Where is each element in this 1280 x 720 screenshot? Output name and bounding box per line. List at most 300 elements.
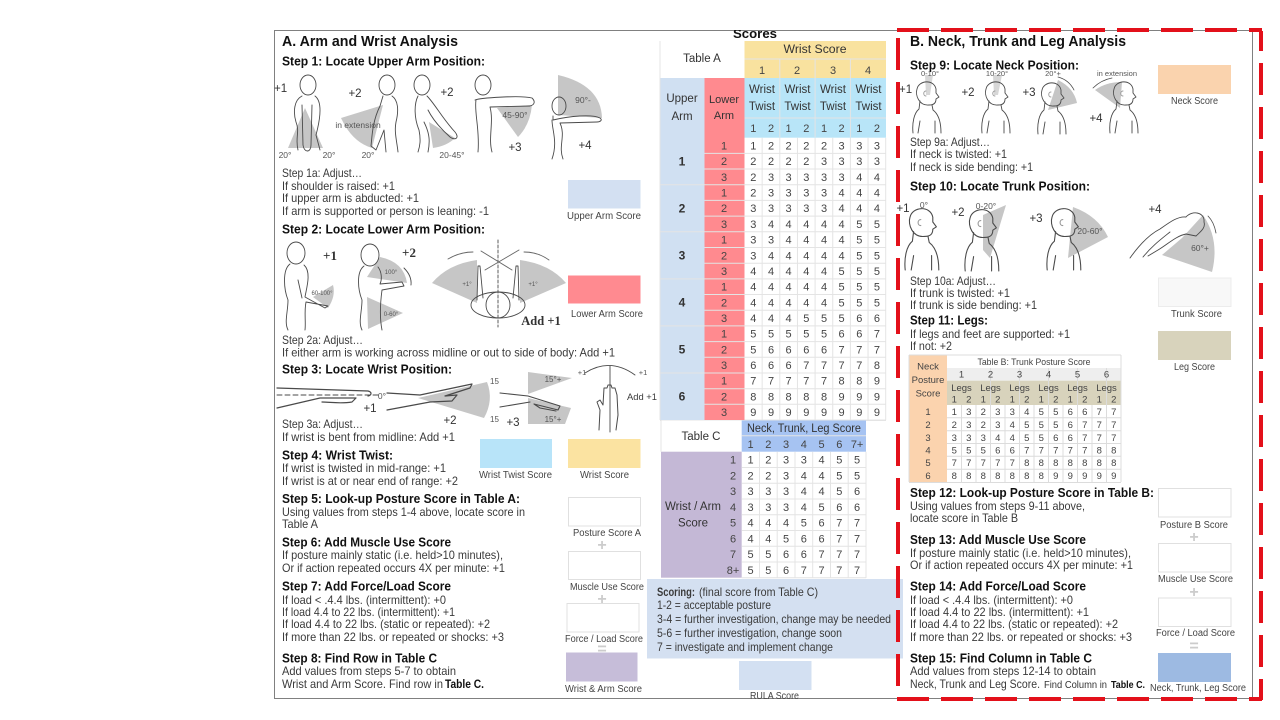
step 12: Using values from steps 9-11 above, — [910, 500, 1085, 513]
icons: trunk positions: +1 — [896, 203, 910, 215]
icons: wrist positions: Add +1 — [627, 392, 657, 403]
icons: wrist positions — [277, 365, 657, 432]
step 11: If not: +2 — [910, 340, 952, 353]
score box: muscle use — [568, 552, 645, 593]
step 10a text — [910, 275, 1037, 312]
step 9 heading: Step 9: Locate Neck Position: — [910, 58, 1079, 72]
score box: leg: Leg Score — [1174, 362, 1215, 373]
table B headers: 2 — [988, 370, 993, 380]
table B headers: Posture — [912, 375, 944, 386]
step 5: Step 5: Look-up Posture Score in Table A: — [282, 491, 520, 506]
step 7 — [282, 578, 504, 644]
table C headers: Wrist / Arm — [665, 501, 721, 513]
table A headers: Wrist — [785, 84, 811, 96]
score box: wrist: Wrist Score — [580, 470, 630, 481]
icons: wrist positions: +1 — [578, 368, 586, 377]
score box: neck — [1158, 65, 1231, 107]
table A values: 44444555 — [750, 282, 880, 294]
table A values: 66677778 — [750, 360, 880, 372]
table A headers: Upper — [666, 93, 698, 105]
lower arm row labels: 2 — [721, 344, 727, 356]
icons: trunk positions — [896, 200, 1216, 272]
step 8: Step 8: Find Row in Table C — [282, 650, 438, 666]
table C row labels: 5 — [730, 518, 736, 530]
lower arm row labels: 2 — [721, 156, 727, 168]
step 1a text: If arm is supported or person is leaning: -1 — [282, 205, 489, 218]
icons: trunk positions: 0-20° — [976, 201, 996, 211]
table B headers: Table B: Trunk Posture Score — [978, 357, 1090, 368]
lower arm row labels: 3 — [721, 266, 727, 278]
score box: force load: Force / Load Score — [565, 634, 644, 645]
table B row labels: 3 — [925, 433, 931, 444]
icons: trunk positions: +3 — [1029, 213, 1043, 225]
step 4 — [282, 448, 458, 488]
panel: B neck, trunk and leg analysis — [896, 33, 1247, 694]
step 3a text — [282, 418, 455, 444]
step 6: If posture mainly static (i.e. held>10 minutes), — [282, 549, 503, 562]
table C headers: 5 — [819, 439, 825, 451]
step 11 — [910, 312, 1070, 353]
top mask clipping the scores heading — [725, 20, 785, 30]
icons: wrist positions: +2 — [443, 415, 457, 427]
step 6 — [282, 534, 505, 575]
table A headers: Twist — [784, 101, 811, 113]
icons: neck positions: +2 — [961, 87, 975, 99]
score box: neck trunk leg: Neck, Trunk, Leg Score — [1150, 683, 1247, 694]
table A headers: 3 — [830, 65, 836, 77]
table C headers — [665, 423, 863, 530]
scoring callout: Scoring: — [657, 586, 695, 599]
table C headers: 7+ — [851, 439, 863, 451]
table B headers: 4 — [1046, 370, 1051, 380]
table B headers: Neck — [917, 362, 939, 372]
icons: upper arm positions — [274, 75, 602, 160]
step 10a text: Step 10a: Adjust… — [910, 275, 996, 288]
icons: lower arm positions: +1 — [323, 248, 337, 263]
table B headers: 1 — [959, 370, 964, 380]
step 14: If load < .4.4 lbs. (intermittent): +0 — [910, 594, 1073, 607]
table A values: 33444455 — [750, 235, 880, 247]
score box: wrist twist: Wrist Twist Score — [479, 470, 553, 481]
icons: upper arm positions: 20° — [362, 150, 374, 160]
table B headers: Legs — [1096, 383, 1117, 394]
icons: neck positions: in extension — [1097, 69, 1137, 78]
table B row labels — [925, 407, 931, 482]
table C values: 1233455 — [748, 455, 860, 467]
score box: force load — [1156, 598, 1236, 639]
table B headers: Legs — [1009, 383, 1030, 394]
lower arm row labels: 1 — [721, 140, 727, 152]
lower arm row labels: 1 — [721, 282, 727, 294]
score box: force load: Force / Load Score — [1156, 628, 1236, 639]
score box: force load — [565, 604, 644, 645]
step 1a text: If shoulder is raised: +1 — [282, 180, 395, 193]
table C row labels: 7 — [730, 549, 736, 561]
table heading: scores: Scores — [733, 26, 777, 41]
score box: posture B: Posture B Score — [1160, 520, 1229, 531]
table A headers: 4 — [865, 65, 871, 77]
score box: trunk: Trunk Score — [1171, 309, 1223, 320]
step 7: If more than 22 lbs. or repeated or shocks: +3 — [282, 631, 504, 644]
plus sign: + — [597, 537, 607, 554]
icons: wrist positions: 15 — [490, 377, 499, 386]
table B values: 333445566777 — [952, 433, 1116, 444]
score box: posture A: Posture Score A — [573, 528, 641, 539]
table C row labels — [727, 455, 739, 577]
step 10a text: If trunk is twisted: +1 — [910, 287, 1010, 300]
table C row labels: 2 — [730, 470, 736, 482]
plus sign: + — [1189, 584, 1199, 601]
icons: wrist positions: +3 — [506, 417, 520, 429]
step 1a text — [282, 167, 489, 218]
panel: A arm and wrist analysis — [274, 33, 657, 695]
table C values: 5567777 — [748, 565, 860, 577]
icons: upper arm positions: 90°- — [575, 95, 591, 105]
step 6: Or if action repeated occurs 4X per minute: +1 — [282, 562, 505, 575]
step 15 — [910, 650, 1145, 691]
table C values: 3334566 — [748, 502, 860, 514]
step 8 — [282, 650, 484, 691]
lower arm row labels: 2 — [721, 250, 727, 262]
score box: wrist twist — [479, 439, 553, 481]
table C values: 4456677 — [748, 533, 860, 545]
score box: upper arm — [567, 180, 642, 222]
step 5: Table A — [282, 518, 318, 531]
step 13: Step 13: Add Muscle Use Score — [910, 532, 1086, 547]
step 14: If more than 22 lbs. or repeated or shocks: +3 — [910, 631, 1132, 644]
scoring callout — [647, 579, 903, 658]
table C headers: 4 — [801, 439, 807, 451]
table A headers — [666, 44, 882, 135]
table A values: 44444555 — [750, 297, 880, 309]
step 14: If load 4.4 to 22 lbs. (intermittent): +1 — [910, 606, 1089, 619]
icons: lower arm positions: +1° — [528, 282, 538, 288]
score box: neck: Neck Score — [1171, 96, 1219, 107]
table B values: 232345556777 — [952, 420, 1116, 431]
icons: upper arm positions: 20-45° — [439, 150, 465, 160]
score box: muscle use: Muscle Use Score — [570, 582, 645, 593]
table B values: 132334556677 — [952, 407, 1116, 418]
step 3 heading: Step 3: Locate Wrist Position: — [282, 362, 452, 376]
step 3a text: Step 3a: Adjust… — [282, 418, 363, 431]
table A headers: 1 — [821, 123, 827, 135]
step 5: Using values from steps 1-4 above, locate score in — [282, 506, 525, 519]
score box: wrist and arm — [565, 652, 643, 695]
red dashed highlight around section B — [897, 30, 1262, 700]
score box: muscle use: Muscle Use Score — [1158, 574, 1234, 585]
lower arm row labels: 3 — [721, 407, 727, 419]
scoring callout: 7 = investigate and implement change — [657, 641, 833, 654]
table C row labels: 1 — [730, 455, 736, 467]
table C — [661, 420, 866, 578]
lower arm row labels: 3 — [721, 219, 727, 231]
lower arm row labels: 1 — [721, 376, 727, 388]
step 13 — [910, 532, 1133, 572]
step 5 — [282, 491, 525, 531]
upper arm row labels: 5 — [679, 342, 686, 356]
table C headers: Neck, Trunk, Leg Score — [747, 423, 861, 435]
table A values: 55555667 — [750, 329, 880, 341]
step 4: Step 4: Wrist Twist: — [282, 448, 393, 462]
upper arm row labels: 2 — [679, 202, 686, 216]
step 1a text: If upper arm is abducted: +1 — [282, 192, 419, 205]
step 10 heading: Step 10: Locate Trunk Position: — [910, 178, 1090, 194]
icons: neck positions: 0-10° — [921, 69, 939, 78]
step 10a text: If trunk is side bending: +1 — [910, 299, 1037, 312]
icons: neck positions: +3 — [1022, 87, 1036, 99]
step 2a text — [282, 334, 615, 360]
table C row labels: 6 — [730, 533, 736, 545]
step 11: If legs and feet are supported: +1 — [910, 328, 1070, 341]
icons: upper arm positions: 20° — [323, 150, 335, 160]
table A values: 88888999 — [750, 391, 880, 403]
table A values: 56666777 — [750, 344, 880, 356]
table C values: 4445677 — [748, 518, 860, 530]
upper arm row labels: 1 — [679, 154, 686, 168]
table B headers: Legs — [951, 383, 972, 394]
score box: wrist and arm: Wrist & Arm Score — [565, 684, 643, 695]
score box: RULA score: RULA Score — [750, 691, 799, 702]
table B headers: 6 — [1104, 370, 1109, 380]
table B row labels: 5 — [925, 458, 931, 469]
table B — [909, 355, 1121, 482]
table A headers: 2 — [874, 123, 880, 135]
score box: posture A — [568, 498, 641, 539]
table A values: 22223333 — [750, 156, 880, 168]
icons: trunk positions: +2 — [951, 207, 965, 219]
table B headers: 121212121212 — [952, 394, 1116, 406]
table C values — [748, 455, 860, 577]
icons: wrist positions: +1 — [363, 403, 377, 415]
score box: trunk — [1158, 278, 1231, 320]
step 8: Add values from steps 5-7 to obtain — [282, 665, 456, 678]
step 2 heading: Step 2: Locate Lower Arm Position: — [282, 222, 485, 236]
table A values: 34444455 — [750, 250, 880, 262]
step 13: If posture mainly static (i.e. held>10 minutes), — [910, 547, 1131, 560]
icons: upper arm positions: +4 — [578, 140, 592, 152]
upper arm row labels: 6 — [679, 390, 686, 404]
table B row labels: 1 — [925, 407, 931, 418]
table B headers: Score — [916, 388, 940, 400]
table A values: 33333444 — [750, 203, 880, 215]
step 14: Step 14: Add Force/Load Score — [910, 578, 1086, 594]
step 13: Or if action repeated occurs 4X per minute: +1 — [910, 559, 1133, 572]
plus sign: + — [597, 591, 607, 608]
table A headers: Wrist — [856, 84, 882, 96]
icons: lower arm positions: 0-60° — [384, 312, 399, 318]
table A headers: Wrist Score — [784, 44, 846, 56]
table C grid — [661, 420, 866, 578]
scoring callout: 5-6 = further investigation, change soon — [657, 627, 842, 640]
table A values: 34444455 — [750, 219, 880, 231]
lower arm row labels: 1 — [721, 329, 727, 341]
table B headers: 5 — [1075, 370, 1080, 380]
icons: neck positions — [899, 69, 1138, 134]
lower arm row labels: 1 — [721, 235, 727, 247]
equals sign: = — [1189, 638, 1199, 655]
table B grid — [909, 355, 1121, 482]
step 2a text: Step 2a: Adjust… — [282, 334, 363, 347]
table B headers: 3 — [1017, 370, 1022, 380]
icons: upper arm positions: 45-90° — [502, 110, 528, 120]
table C headers: Table C — [682, 431, 720, 443]
icons: lower arm positions: Add +1 — [521, 314, 561, 328]
score box: leg — [1158, 331, 1231, 373]
table B headers — [912, 357, 1117, 406]
table A values: 23333344 — [750, 172, 880, 184]
table B values: 888888899999 — [952, 471, 1116, 482]
step 7: If load 4.4 to 22 lbs. (intermittent): +1 — [282, 606, 455, 619]
table B headers: Legs — [980, 383, 1001, 394]
step 9a text: If neck is side bending: +1 — [910, 161, 1033, 174]
table A headers: 1 — [750, 123, 756, 135]
icons: wrist positions: +1 — [639, 368, 647, 377]
step 6: Step 6: Add Muscle Use Score — [282, 534, 451, 550]
icons: upper arm positions: 20° — [279, 150, 291, 160]
table A headers: 2 — [794, 65, 800, 77]
table A headers: Lower — [709, 94, 739, 106]
table A values: 23333444 — [750, 188, 880, 200]
step 12 — [910, 485, 1154, 525]
table B row labels: 4 — [925, 446, 931, 456]
table C row labels: 4 — [730, 502, 736, 514]
table A values: 44455566 — [750, 313, 880, 325]
lower arm row labels: 3 — [721, 172, 727, 184]
table C headers: Score — [678, 518, 708, 530]
scoring callout: 1-2 = acceptable posture — [657, 599, 771, 612]
table A values: 44444555 — [750, 266, 880, 278]
table A headers: 1 — [786, 123, 792, 135]
icons: upper arm positions: +3 — [508, 142, 522, 154]
step 1 heading: Step 1: Locate Upper Arm Position: — [282, 54, 485, 68]
icons: upper arm positions: +2 — [440, 87, 454, 99]
score box: RULA score — [739, 661, 812, 702]
step 4: If wrist is twisted in mid-range: +1 — [282, 462, 446, 475]
table A values — [750, 140, 880, 419]
lower arm row labels: 3 — [721, 360, 727, 372]
icons: trunk positions: 20-60° — [1077, 226, 1103, 236]
step 1a text: Step 1a: Adjust… — [282, 167, 362, 180]
score box: lower arm: Lower Arm Score — [571, 309, 644, 320]
icons: wrist positions: 15°+ — [545, 415, 562, 424]
upper arm row labels — [679, 154, 686, 404]
table C headers: 1 — [748, 439, 754, 451]
upper arm row labels: 4 — [679, 296, 686, 310]
step 8: Wrist and Arm Score. Find row in — [282, 678, 443, 691]
icons: upper arm positions: in extension — [335, 120, 381, 130]
table B row labels: 6 — [925, 471, 931, 482]
step 7: Step 7: Add Force/Load Score — [282, 578, 451, 594]
lower arm row labels: 2 — [721, 391, 727, 403]
table A grid — [660, 41, 886, 420]
icons: neck positions: +4 — [1089, 113, 1103, 125]
heading: B: B. Neck, Trunk and Leg Analysis — [910, 33, 1126, 50]
table B row labels: 2 — [925, 420, 931, 431]
table A headers: Twist — [820, 101, 847, 113]
step 15: Find Column in — [1044, 680, 1107, 691]
step 9a text: Step 9a: Adjust… — [910, 136, 990, 149]
table A headers: Arm — [714, 110, 734, 122]
score box: neck trunk leg — [1150, 653, 1247, 694]
step 12: locate score in Table B — [910, 512, 1018, 525]
step 7: If load 4.4 to 22 lbs. (static or repeated): +2 — [282, 618, 490, 631]
heading: A: A. Arm and Wrist Analysis — [282, 33, 458, 50]
table A values: 12222333 — [750, 140, 880, 152]
table C values: 3334456 — [748, 486, 860, 498]
step 8: Table C. — [445, 678, 484, 691]
table B values — [952, 407, 1116, 482]
scoring callout: 3-4 = further investigation, change may be needed — [657, 613, 891, 626]
lower arm row labels: 2 — [721, 297, 727, 309]
icons: upper arm positions: +1 — [274, 83, 287, 95]
table A values: 77777889 — [750, 376, 880, 388]
score box: lower arm — [568, 276, 644, 320]
table A headers: 2 — [803, 123, 809, 135]
score box: posture B — [1158, 488, 1231, 531]
icons: lower arm positions: 100° — [385, 270, 398, 276]
table A headers: Arm — [671, 111, 693, 123]
step 15: Table C. — [1111, 680, 1145, 691]
lower arm row labels: 1 — [721, 188, 727, 200]
step 15: Add values from steps 12-14 to obtain — [910, 665, 1096, 678]
step 4: If wrist is at or near end of range: +2 — [282, 475, 458, 488]
score box: wrist — [568, 439, 640, 481]
table A headers: 2 — [768, 123, 774, 135]
step 9a text — [910, 136, 1033, 174]
icons: wrist positions: 0° — [378, 391, 386, 401]
icons: upper arm positions: +2 — [348, 88, 362, 100]
table A headers: Twist — [749, 101, 776, 113]
table C values: 2234455 — [748, 470, 860, 482]
icons: trunk positions: +4 — [1148, 204, 1162, 216]
table A values: 99999999 — [750, 407, 880, 419]
table C row labels: 8+ — [727, 565, 739, 577]
table C values: 5566777 — [748, 549, 860, 561]
score box: upper arm: Upper Arm Score — [567, 211, 642, 222]
table A headers: 1 — [856, 123, 862, 135]
equals sign: = — [597, 641, 607, 658]
icons: trunk positions: 60°+ — [1191, 243, 1209, 253]
score box: muscle use — [1158, 544, 1234, 585]
lower arm row labels — [721, 140, 727, 419]
step 12: Step 12: Look-up Posture Score in Table B: — [910, 485, 1154, 500]
step 2a text: If either arm is working across midline or out to side of body: Add +1 — [282, 346, 615, 360]
table A headers: Wrist — [749, 84, 776, 96]
lower arm row labels: 2 — [721, 203, 727, 215]
icons: neck positions: 20°+ — [1045, 69, 1061, 78]
table C headers: 2 — [765, 439, 771, 451]
step 15: Step 15: Find Column in Table C — [910, 650, 1093, 666]
table A headers: 2 — [839, 123, 845, 135]
outer worksheet frame — [274, 30, 1252, 698]
table B values: 555667777788 — [952, 446, 1116, 456]
icons: trunk positions: 0° — [920, 200, 928, 210]
icons: lower arm positions: 60-100° — [311, 291, 333, 297]
table A headers: Wrist — [820, 84, 847, 96]
scoring callout: (final score from Table C) — [699, 586, 818, 599]
step 14 — [910, 578, 1132, 644]
step 3a text: If wrist is bent from midline: Add +1 — [282, 431, 455, 444]
icons: neck positions: 10-20° — [986, 69, 1008, 78]
table C headers: 3 — [783, 439, 789, 451]
table B values: 777778888888 — [952, 458, 1116, 469]
icons: lower arm positions: +2 — [402, 245, 416, 260]
upper arm row labels: 3 — [679, 248, 686, 262]
table A headers: 1 — [759, 65, 765, 77]
table B headers: Legs — [1038, 383, 1059, 394]
step 7: If load < .4.4 lbs. (intermittent): +0 — [282, 594, 446, 607]
step 9a text: If neck is twisted: +1 — [910, 148, 1007, 161]
